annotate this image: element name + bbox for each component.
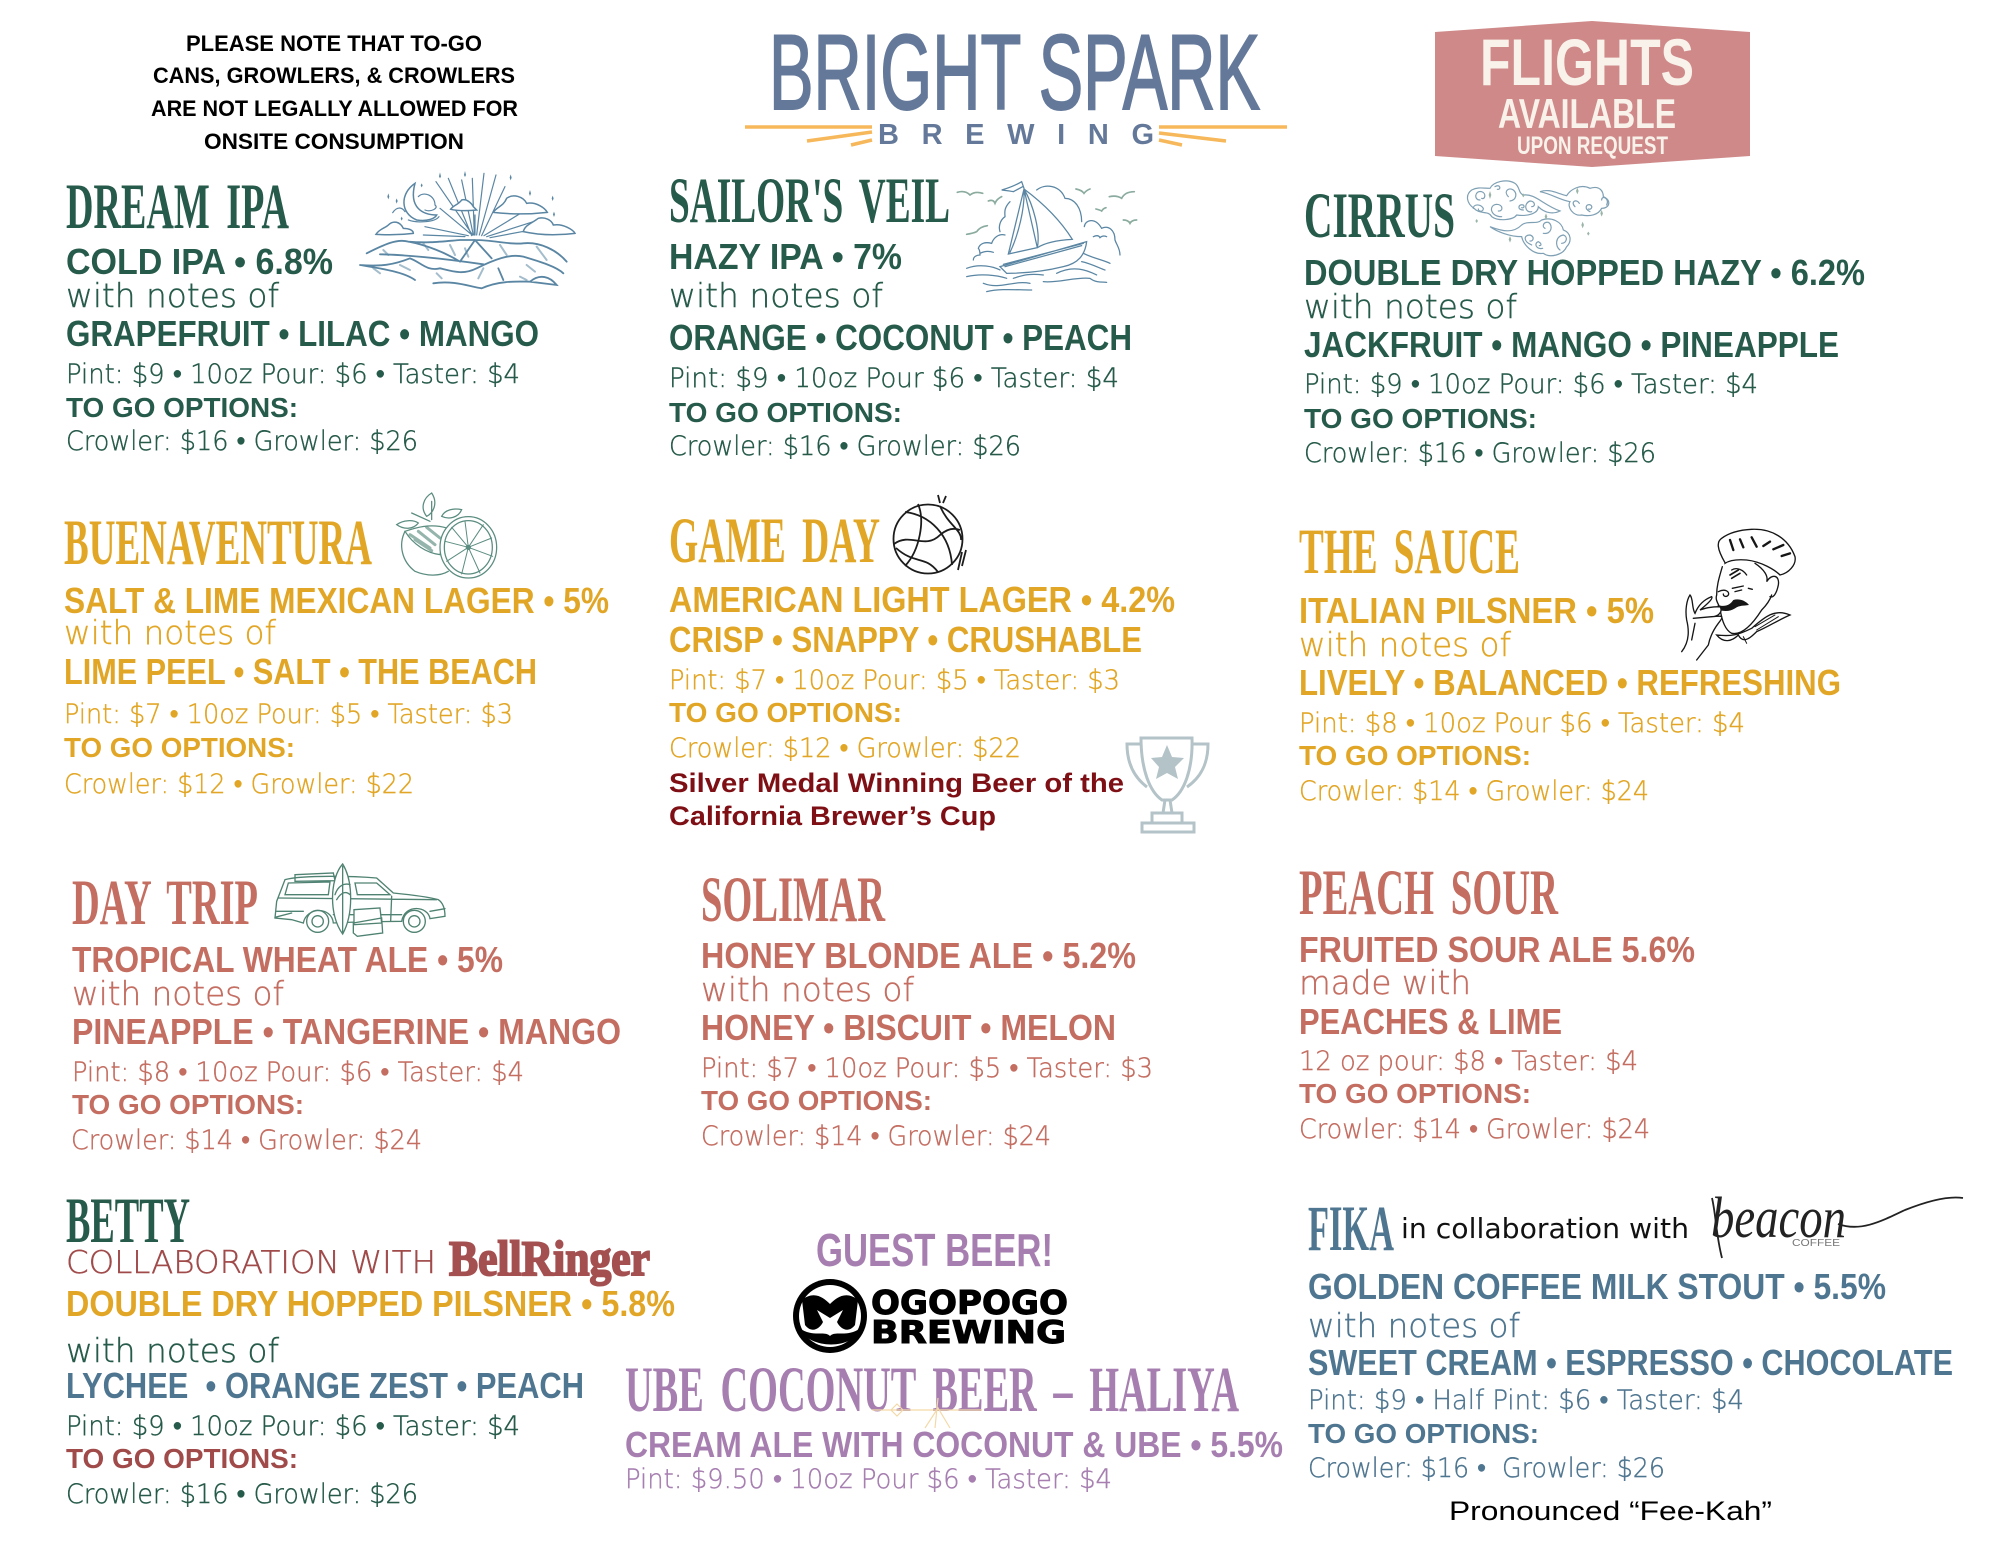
panel: The Sauce: TO GO OPTIONS:	[1299, 740, 1531, 771]
panel: Day Trip: PINEAPPLE • TANGERINE • MANGO	[72, 1011, 621, 1052]
panel: Buenaventura: Crowler: $12 • Growler: $22	[64, 769, 414, 800]
panel: Solimar: TO GO OPTIONS:	[701, 1085, 932, 1116]
panel: Betty: DOUBLE DRY HOPPED PILSNER • 5.8%	[66, 1283, 675, 1324]
panel: Game Day: TO GO OPTIONS:	[669, 697, 902, 728]
icon: mountains, moon and sunrise	[360, 171, 575, 288]
icon: trophy	[1127, 738, 1208, 832]
panel: Day Trip: TROPICAL WHEAT ALE • 5%	[72, 939, 503, 980]
panel: Dream IPA: TO GO OPTIONS:	[66, 392, 298, 423]
panel: Cirrus: with notes of	[1304, 287, 1517, 326]
panel: Dream IPA: Crowler: $16 • Growler: $26	[66, 426, 418, 457]
icon: limes and leaves	[397, 493, 497, 578]
panel: Fika: GOLDEN COFFEE MILK STOUT • 5.5%	[1308, 1266, 1886, 1307]
panel: Game Day: Crowler: $12 • Growler: $22	[669, 733, 1021, 764]
logo: Bright Spark Brewing: BRIGHT SPARK	[769, 12, 1260, 132]
panel: Solimar: with notes of	[701, 970, 914, 1009]
logo: Ogopogo Brewing	[793, 1279, 1068, 1353]
logo: Beacon Coffee signature: beacon	[1711, 1185, 1846, 1250]
badge: flights available: UPON REQUEST	[1517, 132, 1668, 160]
panel: Sailor's Veil: SAILOR'S VEIL	[669, 165, 950, 237]
panel: Fika: in collaboration with	[1401, 1212, 1689, 1245]
panel: Buenaventura: LIME PEEL • SALT • THE BEACH	[64, 651, 537, 692]
panel: Game Day: CRISP • SNAPPY • CRUSHABLE	[669, 619, 1142, 660]
panel: The Sauce: Pint: $8 • 10oz Pour $6 • Taster: $4	[1299, 708, 1745, 739]
panel: Dream IPA	[66, 171, 539, 457]
logo: Bright Spark Brewing: BREWING	[878, 119, 1154, 151]
panel: Peach Sour: PEACH SOUR	[1299, 857, 1559, 929]
panel: Buenaventura: TO GO OPTIONS:	[64, 732, 295, 763]
panel: Fika: Crowler: $16 • Growler: $26	[1308, 1453, 1665, 1484]
panel: Cirrus: CIRRUS	[1304, 180, 1455, 252]
badge: flights available	[1435, 21, 1750, 167]
badge: flights available: FLIGHTS	[1480, 25, 1694, 99]
icon: truck with surfboard	[275, 864, 445, 936]
callout: silver medal award	[669, 768, 1124, 831]
panel: Peach Sour: 12 oz pour: $8 • Taster: $4	[1299, 1046, 1638, 1077]
panel: Peach Sour: TO GO OPTIONS:	[1299, 1078, 1531, 1109]
panel: Buenaventura: with notes of	[64, 613, 276, 652]
panel: Day Trip: Crowler: $14 • Growler: $24	[71, 1125, 422, 1156]
panel: Guest beer: Pint: $9.50 • 10oz Pour $6 • Taster: $4	[625, 1464, 1112, 1495]
panel: Sailor's Veil: TO GO OPTIONS:	[669, 397, 902, 428]
panel: Game Day: AMERICAN LIGHT LAGER • 4.2%	[669, 579, 1175, 620]
panel: Game Day: GAME DAY	[669, 505, 880, 577]
logo: Bright Spark Brewing	[745, 12, 1287, 151]
panel: Betty: COLLABORATION WITH	[66, 1245, 436, 1281]
panel: Buenaventura: SALT & LIME MEXICAN LAGER • 5%	[64, 580, 609, 621]
callout: silver medal award: Silver Medal Winning Beer of the	[669, 768, 1124, 798]
panel: Dream IPA: COLD IPA • 6.8%	[66, 241, 333, 282]
panel: Fika: with notes of	[1308, 1306, 1520, 1345]
panel: Guest beer	[625, 1224, 1283, 1495]
decoration: sparkles	[872, 1398, 982, 1428]
panel: Game Day	[669, 505, 1175, 764]
panel: Peach Sour: PEACHES & LIME	[1299, 1001, 1562, 1042]
panel: Peach Sour: Crowler: $14 • Growler: $24	[1299, 1114, 1650, 1145]
panel: Buenaventura	[64, 507, 609, 800]
panel: Day Trip: with notes of	[72, 974, 284, 1013]
panel: Guest beer: UBE COCONUT BEER – HALIYA	[625, 1354, 1239, 1426]
panel: Sailor's Veil: ORANGE • COCONUT • PEACH	[669, 317, 1132, 358]
panel: Dream IPA: Pint: $9 • 10oz Pour: $6 • Taster: $4	[66, 359, 520, 390]
notice: to-go legal note: CANS, GROWLERS, & CROWLERS	[153, 63, 515, 88]
notice: to-go legal note	[151, 31, 518, 154]
panel: The Sauce: ITALIAN PILSNER • 5%	[1299, 590, 1654, 631]
panel: Betty: TO GO OPTIONS:	[66, 1443, 298, 1474]
panel: Betty	[66, 1185, 675, 1510]
panel: Sailor's Veil	[669, 165, 1132, 462]
panel: Cirrus: JACKFRUIT • MANGO • PINEAPPLE	[1304, 324, 1839, 365]
panel: Fika: Pronounced “Fee-Kah”	[1449, 1496, 1772, 1526]
panel: Fika: TO GO OPTIONS:	[1308, 1418, 1539, 1449]
callout: silver medal award: California Brewer’s Cup	[669, 801, 996, 831]
panel: Sailor's Veil: Crowler: $16 • Growler: $26	[669, 431, 1021, 462]
panel: Betty: with notes of	[66, 1331, 279, 1370]
panel: Solimar: HONEY BLONDE ALE • 5.2%	[701, 935, 1136, 976]
panel: Solimar: HONEY • BISCUIT • MELON	[701, 1007, 1116, 1048]
logo: Beacon Coffee signature	[1711, 1185, 1963, 1258]
panel: Cirrus	[1304, 180, 1865, 469]
badge: flights available: AVAILABLE	[1498, 90, 1676, 137]
notice: to-go legal note: ONSITE CONSUMPTION	[204, 129, 464, 154]
panel: The Sauce	[1299, 516, 1841, 807]
panel: Sailor's Veil: with notes of	[669, 276, 883, 315]
panel: Buenaventura: Pint: $7 • 10oz Pour: $5 • Taster: $3	[64, 699, 513, 730]
panel: Buenaventura: BUENAVENTURA	[64, 507, 372, 579]
panel: Betty: LYCHEE • ORANGE ZEST • PEACH	[66, 1365, 584, 1406]
panel: Day Trip: Pint: $8 • 10oz Pour: $6 • Taster: $4	[72, 1057, 524, 1088]
panel: Fika: Pint: $9 • Half Pint: $6 • Taster: $4	[1308, 1385, 1744, 1416]
panel: Betty: Crowler: $16 • Growler: $26	[66, 1479, 418, 1510]
panel: Betty: Pint: $9 • 10oz Pour: $6 • Taster: $4	[66, 1411, 520, 1442]
panel: Solimar: Pint: $7 • 10oz Pour: $5 • Taster: $3	[701, 1053, 1153, 1084]
panel: Solimar: SOLIMAR	[701, 864, 886, 936]
logo: Beacon Coffee signature: COFFEE	[1792, 1238, 1840, 1249]
panel: Sailor's Veil: Pint: $9 • 10oz Pour $6 • Taster: $4	[669, 363, 1119, 394]
panel: Dream IPA: DREAM IPA	[66, 171, 289, 243]
panel: The Sauce: Crowler: $14 • Growler: $24	[1299, 776, 1649, 807]
panel: Cirrus: Pint: $9 • 10oz Pour: $6 • Taster: $4	[1304, 369, 1758, 400]
panel: Game Day: Pint: $7 • 10oz Pour: $5 • Taster: $3	[669, 665, 1120, 696]
logo: Ogopogo Brewing: BREWING	[871, 1315, 1066, 1351]
panel: Betty: BellRinger	[449, 1230, 650, 1286]
notice: to-go legal note: PLEASE NOTE THAT TO-GO	[186, 31, 482, 56]
panel: Peach Sour: FRUITED SOUR ALE 5.6%	[1299, 929, 1695, 970]
panel: Dream IPA: GRAPEFRUIT • LILAC • MANGO	[66, 313, 539, 354]
panel: Guest beer: GUEST BEER!	[816, 1224, 1053, 1276]
icon: basketball	[894, 495, 966, 574]
panel: Day Trip	[71, 867, 621, 1156]
icon: chef kissing fingers	[1682, 529, 1795, 660]
panel: Dream IPA: with notes of	[66, 276, 279, 315]
panel: Cirrus: DOUBLE DRY HOPPED HAZY • 6.2%	[1304, 252, 1865, 293]
panel: Fika: FIKA	[1308, 1193, 1394, 1265]
panel: Cirrus: TO GO OPTIONS:	[1304, 403, 1537, 434]
panel: Fika	[1308, 1193, 1953, 1526]
icon: sailboat	[957, 182, 1137, 292]
panel: Solimar	[701, 864, 1153, 1152]
panel: Solimar: Crowler: $14 • Growler: $24	[701, 1121, 1051, 1152]
icon: swirling clouds	[1467, 181, 1609, 256]
panel: Day Trip: TO GO OPTIONS:	[72, 1089, 304, 1120]
panel: The Sauce: with notes of	[1299, 625, 1511, 664]
notice: to-go legal note: ARE NOT LEGALLY ALLOWED FOR	[151, 96, 518, 121]
panel: Peach Sour	[1299, 857, 1695, 1145]
panel: The Sauce: LIVELY • BALANCED • REFRESHING	[1299, 662, 1841, 703]
panel: Guest beer: CREAM ALE WITH COCONUT & UBE • 5.5%	[625, 1424, 1283, 1465]
panel: Betty: BETTY	[66, 1185, 190, 1257]
panel: Peach Sour: made with	[1299, 963, 1471, 1002]
panel: Sailor's Veil: HAZY IPA • 7%	[669, 236, 902, 277]
panel: Cirrus: Crowler: $16 • Growler: $26	[1304, 438, 1656, 469]
logo: Ogopogo Brewing: OGOPOGO	[871, 1283, 1068, 1322]
panel: Day Trip: DAY TRIP	[72, 867, 258, 939]
panel: The Sauce: THE SAUCE	[1299, 516, 1520, 588]
